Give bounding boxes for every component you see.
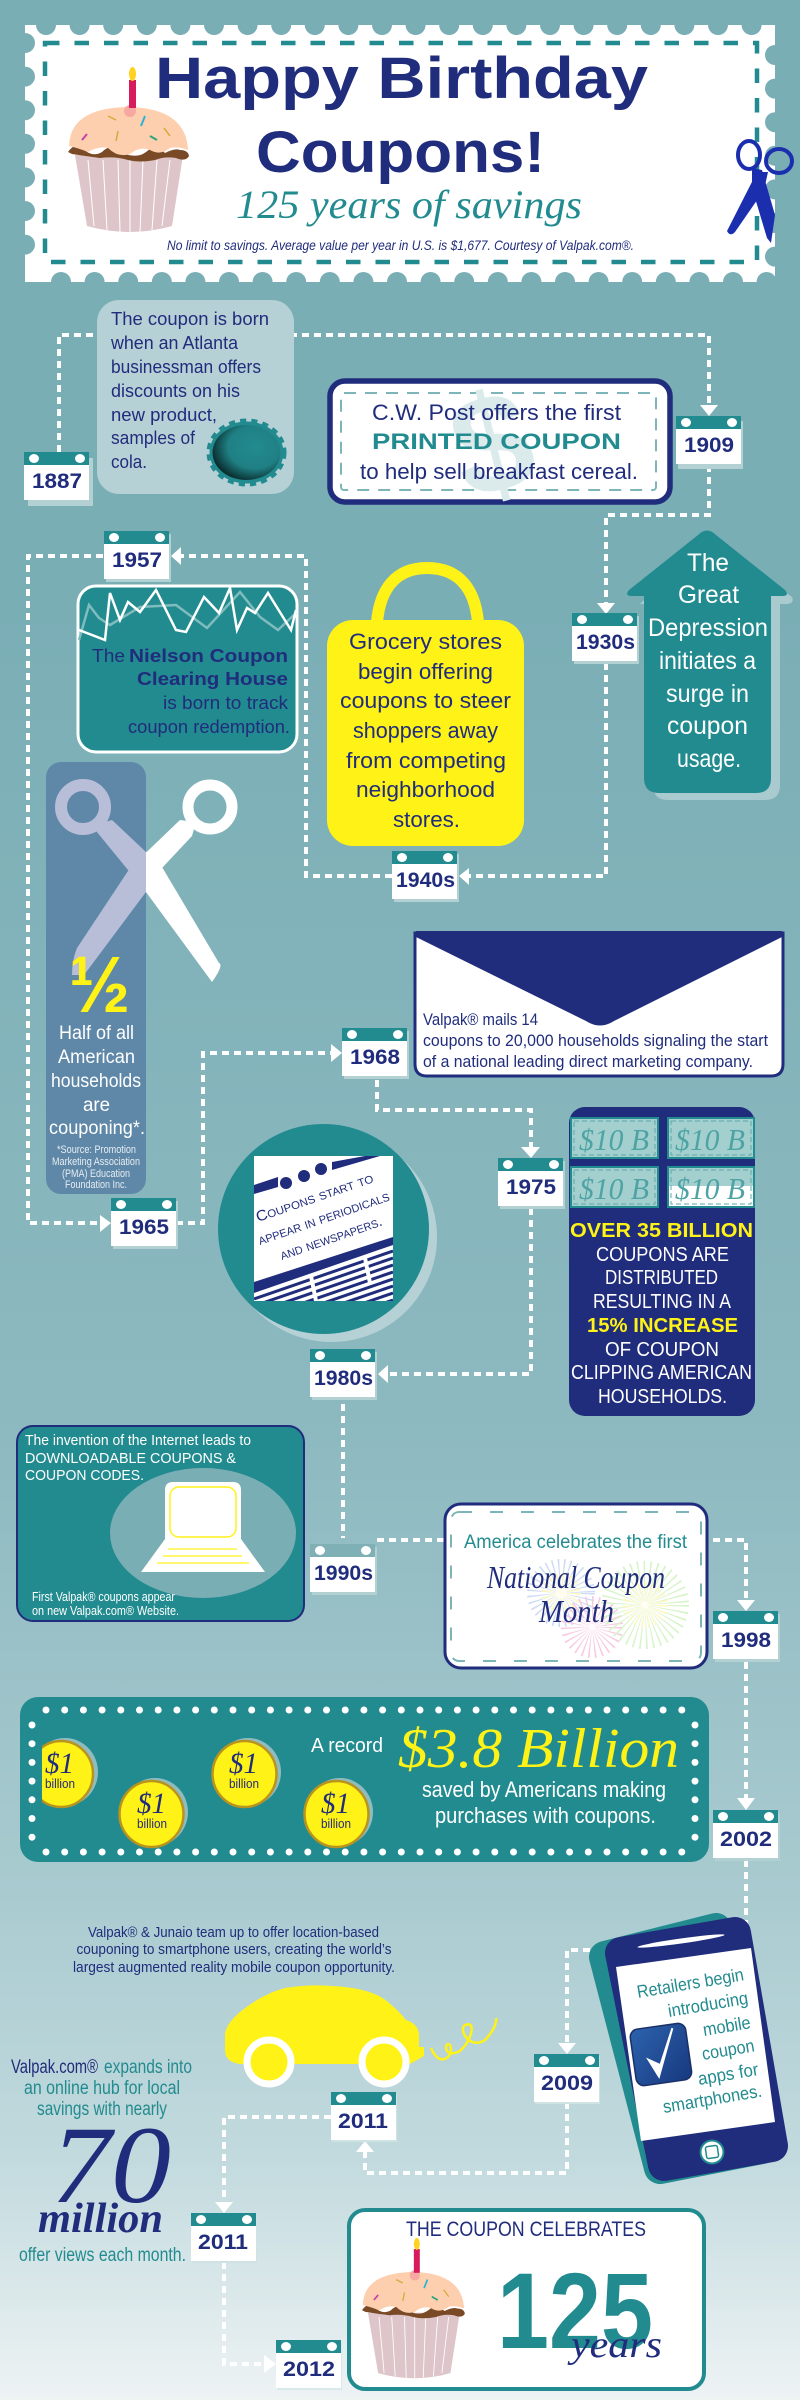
icon: blue scissors [727, 141, 792, 243]
tickets: $10 B: $10 B [675, 1171, 745, 1206]
chart: zigzag lines [79, 588, 296, 640]
panel: 1998 national coupon month [445, 1504, 707, 1668]
tickets: $10 B: $10 B [579, 1122, 649, 1157]
text: retailers begin [635, 1964, 763, 2117]
date tag: 2011 online: 2011 [338, 2110, 388, 2133]
panel: 1975 over 35 billion [569, 1107, 755, 1416]
date tag: 1990s: 1990s [314, 1562, 373, 1585]
text: half of all households [49, 1023, 145, 1139]
date tag: 1965: 1965 [119, 1216, 169, 1239]
text: half of all households: are [83, 1095, 110, 1116]
text: invention of the internet: The invention of the Internet leads to [25, 1432, 251, 1449]
text: grocery stores: stores. [393, 807, 460, 832]
icon: scissors [61, 785, 232, 982]
date tag: 1887: 1887 [32, 470, 82, 493]
date tag: 2009: 2009 [541, 2072, 593, 2095]
text: saved by americans [422, 1777, 666, 1828]
text: retailers begin: coupon [700, 2035, 756, 2064]
heading: the coupon celebrates: THE COUPON CELEBRATES [406, 2218, 646, 2241]
text: Nielson: is born to track [163, 693, 289, 713]
date tag: 1968: 1968 [350, 1046, 400, 1069]
panel: 1980s newspaper circle [218, 1124, 437, 1348]
source note: Foundation Inc. [65, 1179, 127, 1191]
panel: 1957 Nielson clearing house [78, 586, 297, 752]
icon: computer [141, 1482, 265, 1572]
text: great depression: Depression [648, 614, 768, 642]
figure: 125 years: 125 [497, 2250, 653, 2371]
text: valpak mails: Valpak® mails 14 [423, 1010, 538, 1029]
panel: 2002 3.8 billion [20, 1697, 709, 1862]
text: valpak mails: coupons to 20,000 households signaling the start [423, 1031, 768, 1050]
date tag: 2011 online [331, 2092, 397, 2142]
icon: yellow car [225, 1985, 496, 2084]
source note [52, 1144, 140, 1191]
date tag: 1980s [310, 1349, 377, 1400]
source note: (PMA) Education [62, 1168, 130, 1180]
date tag: 2002: 2002 [720, 1828, 772, 1851]
text: valpak and junaio: largest augmented reality mobile coupon opportunity. [73, 1959, 395, 1976]
coin 2: billion [137, 1816, 167, 1831]
icon: fireworks [541, 1573, 669, 1644]
text: national coupon month [486, 1559, 665, 1629]
text: Nielson: coupon redemption. [128, 717, 290, 737]
text: periodicals and newspapers: appear in periodicals [256, 1188, 392, 1249]
panel: 1887 coupon is born [97, 300, 294, 494]
text: printed coupon [360, 400, 638, 484]
coin 1: $1 [45, 1747, 74, 1780]
text: coupon is born: new product, [111, 405, 217, 425]
date tag: 2011 hub: 2011 [198, 2231, 248, 2254]
text: over 35 billion: DISTRIBUTED [605, 1267, 718, 1289]
coin 4: billion [321, 1816, 351, 1831]
text: coupon is born: samples of [111, 428, 196, 448]
callout: 70 million offer views: 70 [51, 2104, 171, 2226]
text: Nielson: Clearing House [137, 669, 288, 689]
text: america celebrates: America celebrates the first [464, 1532, 688, 1553]
callout: 70 million offer views: Valpak.com® [11, 2057, 98, 2078]
date tag: 2012 [276, 2340, 342, 2390]
source note: Marketing Association [52, 1156, 140, 1168]
text: valpak and junaio: Valpak® & Junaio team up to offer location-based [88, 1924, 379, 1941]
text: Nielson: Nielson Coupon [129, 646, 288, 666]
coin 3: billion [229, 1776, 259, 1791]
text: printed coupon: PRINTED COUPON [372, 429, 621, 454]
text: half of all households: American [58, 1047, 135, 1068]
tagline: No limit to savings. Average value per year in U.S. is $1,677. Courtesy of Valpak.com®. [167, 237, 634, 253]
text: coupon is born: businessman offers [111, 357, 261, 377]
text: first valpak coupons: on new Valpak.com® Website. [32, 1603, 179, 1618]
text: first valpak coupons [32, 1589, 179, 1618]
date tag: 1990s [310, 1544, 377, 1595]
text: retailers begin: Retailers begin [635, 1964, 745, 2002]
text: first valpak coupons: First Valpak® coupons appear [32, 1589, 176, 1604]
text: saved by americans: saved by Americans making [422, 1777, 666, 1802]
date tag: 1965 [111, 1198, 178, 1249]
coin 2: $1 [137, 1787, 166, 1820]
text: Nielson: The [92, 646, 125, 666]
watermark: dollar sign: $ [435, 358, 549, 529]
panel: 1930s arrow great depression [627, 530, 793, 800]
date tag: 1957: 1957 [112, 549, 162, 572]
coin 2 [120, 1778, 188, 1847]
text: over 35 billion: HOUSEHOLDS. [598, 1386, 727, 1408]
text: over 35 billion: OVER 35 BILLION [570, 1220, 753, 1242]
date tag: 1930s: 1930s [576, 631, 635, 654]
text: national coupon month: Month [538, 1593, 614, 1629]
date tag: 1998: 1998 [721, 1629, 771, 1652]
date tag: 2012: 2012 [283, 2358, 335, 2381]
text: invention of the internet [25, 1432, 251, 1484]
text: great depression: usage. [677, 745, 741, 773]
text: coupon is born: cola. [111, 452, 147, 472]
text: over 35 billion: RESULTING IN A [593, 1291, 732, 1313]
text: valpak mails [423, 1010, 768, 1071]
text: half of all households: Half of all [59, 1023, 134, 1044]
date tag: 1998 [713, 1611, 780, 1662]
date tag: 1980s: 1980s [314, 1367, 373, 1390]
source note: *Source: Promotion [57, 1144, 136, 1156]
text: coupon is born: when an Atlanta [110, 333, 239, 353]
icon: home button [700, 2140, 724, 2164]
date tag: 2002 [713, 1810, 780, 1861]
icon: bottle cap [210, 422, 284, 484]
panel: 1940s shopping bag [327, 568, 524, 846]
text: invention of the internet: DOWNLOADABLE COUPONS & [25, 1450, 236, 1467]
text: valpak mails: of a national leading direct marketing company. [423, 1052, 753, 1071]
date tag: 1957 [104, 531, 171, 582]
icon: checkbox [629, 2022, 693, 2087]
subtitle: 125 years of savings: 125 years of savings [236, 182, 582, 227]
text: great depression [648, 549, 768, 773]
text: printed coupon: to help sell breakfast cereal. [360, 459, 638, 484]
callout: 70 million offer views: million [38, 2196, 163, 2242]
icon: cupcake [68, 67, 189, 232]
text: grocery stores: coupons to steer [340, 688, 511, 713]
date tag: 1940s: 1940s [396, 869, 455, 892]
text: periodicals and newspapers [254, 1170, 392, 1264]
panel: 1968 envelope [415, 931, 783, 1076]
text: half of all households: households [51, 1071, 141, 1092]
tickets: $10 B [571, 1118, 754, 1207]
timeline connectors [28, 335, 755, 2373]
text: coupon is born: discounts on his [111, 381, 240, 401]
text: invention of the internet: COUPON CODES. [25, 1467, 144, 1484]
callout: 70 million offer views: savings with nearly [37, 2099, 167, 2120]
text: great depression: coupon [667, 712, 748, 740]
text: over 35 billion: CLIPPING AMERICAN [571, 1362, 752, 1384]
title: Happy Birthday Coupons! [155, 46, 648, 185]
coin 1: billion [45, 1776, 75, 1791]
text: over 35 billion: OF COUPON [605, 1339, 719, 1361]
text: retailers begin: introducing [666, 1988, 750, 2021]
callout: 70 million offer views: an online hub for local [24, 2078, 180, 2099]
date tag: 1909 [676, 416, 743, 469]
text: coupon is born: The coupon is born [111, 309, 269, 329]
text: retailers begin: smartphones. [661, 2081, 763, 2117]
coin 1 [42, 1738, 98, 1808]
title: Happy Birthday Coupons!: Coupons! [256, 120, 545, 185]
date tag: 1930s [572, 613, 639, 664]
figure: 125 years: years [567, 2324, 662, 2366]
text: grocery stores [340, 629, 511, 832]
title coupon [25, 25, 792, 282]
text: over 35 billion [570, 1220, 753, 1408]
text: Nielson [92, 646, 290, 737]
coin 4: $1 [321, 1787, 350, 1820]
text: grocery stores: from competing [346, 748, 506, 773]
text: retailers begin: apps for [696, 2059, 760, 2089]
date tag: 1909: 1909 [684, 434, 734, 457]
text: grocery stores: begin offering [358, 659, 493, 684]
tickets: $10 B: $10 B [675, 1122, 745, 1157]
text: grocery stores: neighborhood [356, 777, 495, 802]
fraction: one half: ½ [69, 940, 130, 1029]
text: over 35 billion: 15% INCREASE [587, 1315, 738, 1337]
date tag: 1975 [498, 1158, 565, 1209]
icon: cupcake [362, 2238, 465, 2378]
text: retailers begin: mobile [701, 2012, 752, 2040]
date tag: 1975: 1975 [506, 1176, 556, 1199]
date tag: 1940s [392, 851, 459, 902]
panel: 1990s internet [17, 1426, 304, 1621]
text: a record: A record [311, 1735, 383, 1757]
text: great depression: initiates a [659, 647, 756, 675]
text: great depression: surge in [666, 680, 749, 708]
date tag: 1887 [24, 452, 93, 506]
figure: $3.8 billion: $3.8 Billion [398, 1718, 679, 1780]
text: valpak and junaio [73, 1924, 395, 1976]
text: periodicals and newspapers: and newspapers. [278, 1213, 384, 1264]
coin 4 [304, 1778, 373, 1847]
text: national coupon month: National Coupon [486, 1559, 665, 1595]
text: periodicals and newspapers: Coupons start to [254, 1170, 376, 1226]
coin 3: $1 [229, 1747, 258, 1780]
tickets: $10 B: $10 B [579, 1171, 649, 1206]
coin 3 [212, 1738, 281, 1807]
callout: 70 million offer views: expands into [104, 2057, 192, 2078]
text: grocery stores: shoppers away [353, 718, 498, 743]
date tag: 2009 [534, 2054, 600, 2104]
date tag: 1968 [342, 1028, 409, 1079]
date tag: 2011 hub [191, 2213, 257, 2263]
text: half of all households: couponing*. [49, 1118, 145, 1139]
text: valpak and junaio: couponing to smartphone users, creating the world’s [76, 1941, 392, 1958]
panel: 2012 125 years [349, 2210, 704, 2389]
text: printed coupon: C.W. Post offers the first [372, 400, 621, 425]
text: great depression: The [687, 549, 729, 577]
panel: 1965 half of households [46, 762, 232, 1194]
panel: 1909 printed coupon [330, 358, 670, 529]
panel: 2009 smartphone [605, 1929, 775, 2168]
text: coupon is born [110, 309, 269, 472]
text: great depression: Great [678, 581, 739, 609]
newspaper artwork [254, 1156, 393, 1301]
callout: 70 million offer views: offer views each month. [19, 2245, 186, 2266]
callout: 70 million offer views [11, 2057, 192, 2266]
text: over 35 billion: COUPONS ARE [596, 1244, 729, 1266]
title: Happy Birthday Coupons!: Happy Birthday [155, 46, 648, 111]
text: grocery stores: Grocery stores [349, 629, 502, 654]
text: saved by americans: purchases with coupons. [435, 1803, 656, 1828]
